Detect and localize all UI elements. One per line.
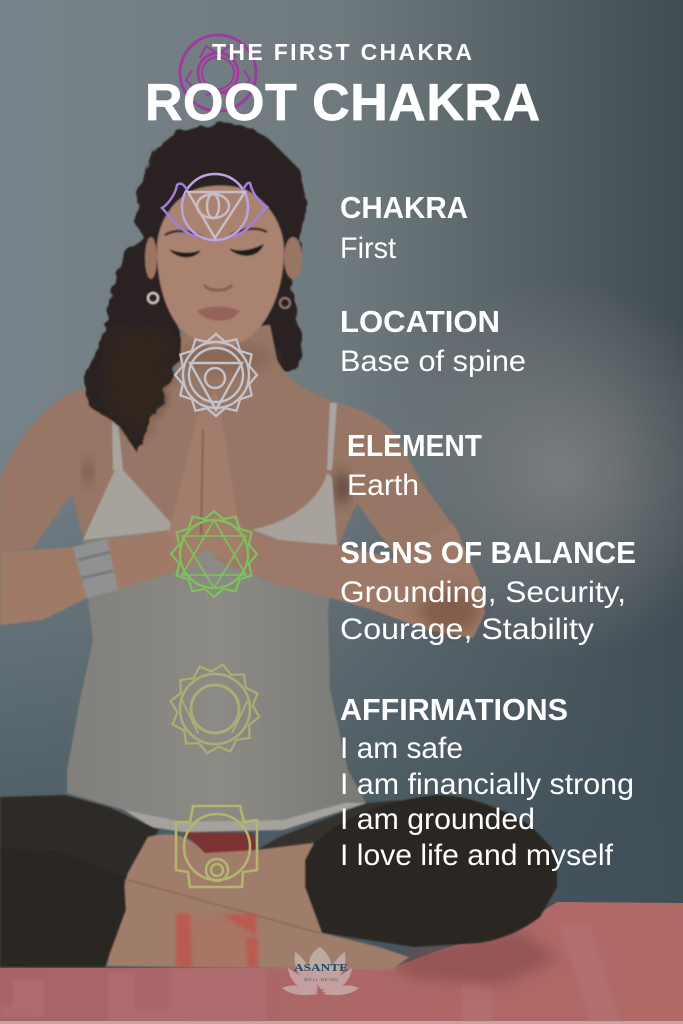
main hair with curls [83,123,307,453]
section: signs of balance [340,535,636,646]
section: signs of balance: Grounding, Security, [340,576,626,609]
woman meditating [0,123,557,970]
earrings [148,293,290,308]
left forearm [0,530,200,625]
logo: Asante Well Being: WELL BEING [304,977,338,982]
chakra: crown [180,35,256,111]
legs [0,795,557,970]
subtitle: THE FIRST CHAKRA [212,39,472,65]
face [157,186,284,347]
chakra: root [176,913,258,967]
yoga mat [0,902,683,1024]
ears [145,237,302,279]
right forearm [215,523,485,638]
chakra: heart [171,511,257,597]
title: ROOT CHAKRA [145,74,540,132]
chakra: solar plexus [163,657,267,761]
hair right curls [262,280,303,372]
section: location [340,304,526,378]
section: chakra: CHAKRA [340,190,468,225]
section: affirmations: I am financially strong [340,768,634,801]
section: affirmations: I am safe [340,732,463,765]
logo: Asante Well Being [282,947,359,995]
section: element [347,428,482,502]
section: affirmations: AFFIRMATIONS [340,692,568,727]
chakra: third eye [162,174,267,240]
chakra: throat [175,334,257,416]
section: affirmations: I love life and myself [340,839,614,872]
section: location: LOCATION [340,304,500,339]
chakra: sacral [176,806,257,887]
section: affirmations: I am grounded [340,803,535,836]
section: signs of balance: SIGNS OF BALANCE [340,535,636,570]
section: location: Base of spine [340,345,526,378]
section: chakra [340,190,468,265]
section: element: ELEMENT [347,428,482,463]
section: element: Earth [347,469,419,502]
shoulders, chest and upper arms [0,325,460,562]
section: affirmations [340,692,634,872]
bracelet [73,539,118,598]
section: chakra: First [340,232,397,265]
section: signs of balance: Courage, Stability [340,613,594,646]
tank top [67,403,366,832]
praying hands [168,392,247,567]
logo: Asante Well Being: ASANTE [294,963,348,974]
